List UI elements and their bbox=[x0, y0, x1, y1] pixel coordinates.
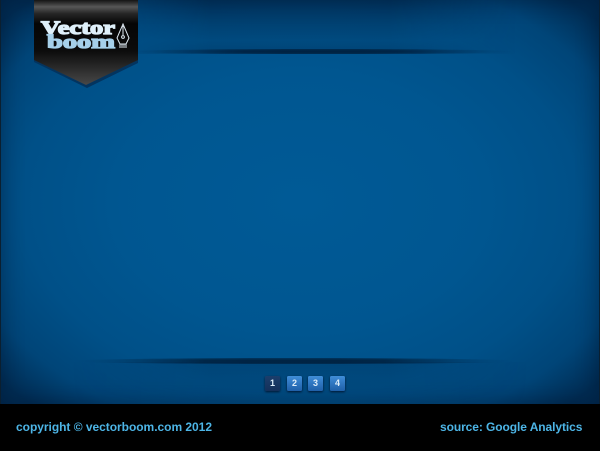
bottom glow band bbox=[132, 362, 468, 389]
top shadow band bbox=[138, 0, 480, 54]
ribbon body bbox=[34, 0, 138, 85]
page button 4: 4 bbox=[335, 378, 340, 388]
page button 2: 2 bbox=[292, 378, 297, 388]
page button 2 bbox=[287, 376, 302, 391]
logo word boom: boom bbox=[47, 32, 115, 53]
footer copyright text: copyright © vectorboom.com 2012 bbox=[16, 420, 212, 434]
pagination buttons bbox=[264, 376, 346, 394]
page button 1 bbox=[265, 376, 280, 391]
page button 3: 3 bbox=[313, 378, 318, 388]
logo ribbon badge bbox=[34, 0, 138, 88]
ribbon shadow bbox=[34, 58, 138, 88]
icon: pen nib bbox=[117, 24, 129, 48]
bottom shadow line bbox=[100, 358, 488, 364]
logo word Vector: Vector bbox=[41, 18, 116, 39]
page button 3 bbox=[308, 376, 323, 391]
page button 1: 1 bbox=[270, 378, 275, 388]
footer source text: source: Google Analytics bbox=[440, 420, 582, 434]
page button 4 bbox=[330, 376, 345, 391]
top shadow line bbox=[156, 49, 486, 54]
